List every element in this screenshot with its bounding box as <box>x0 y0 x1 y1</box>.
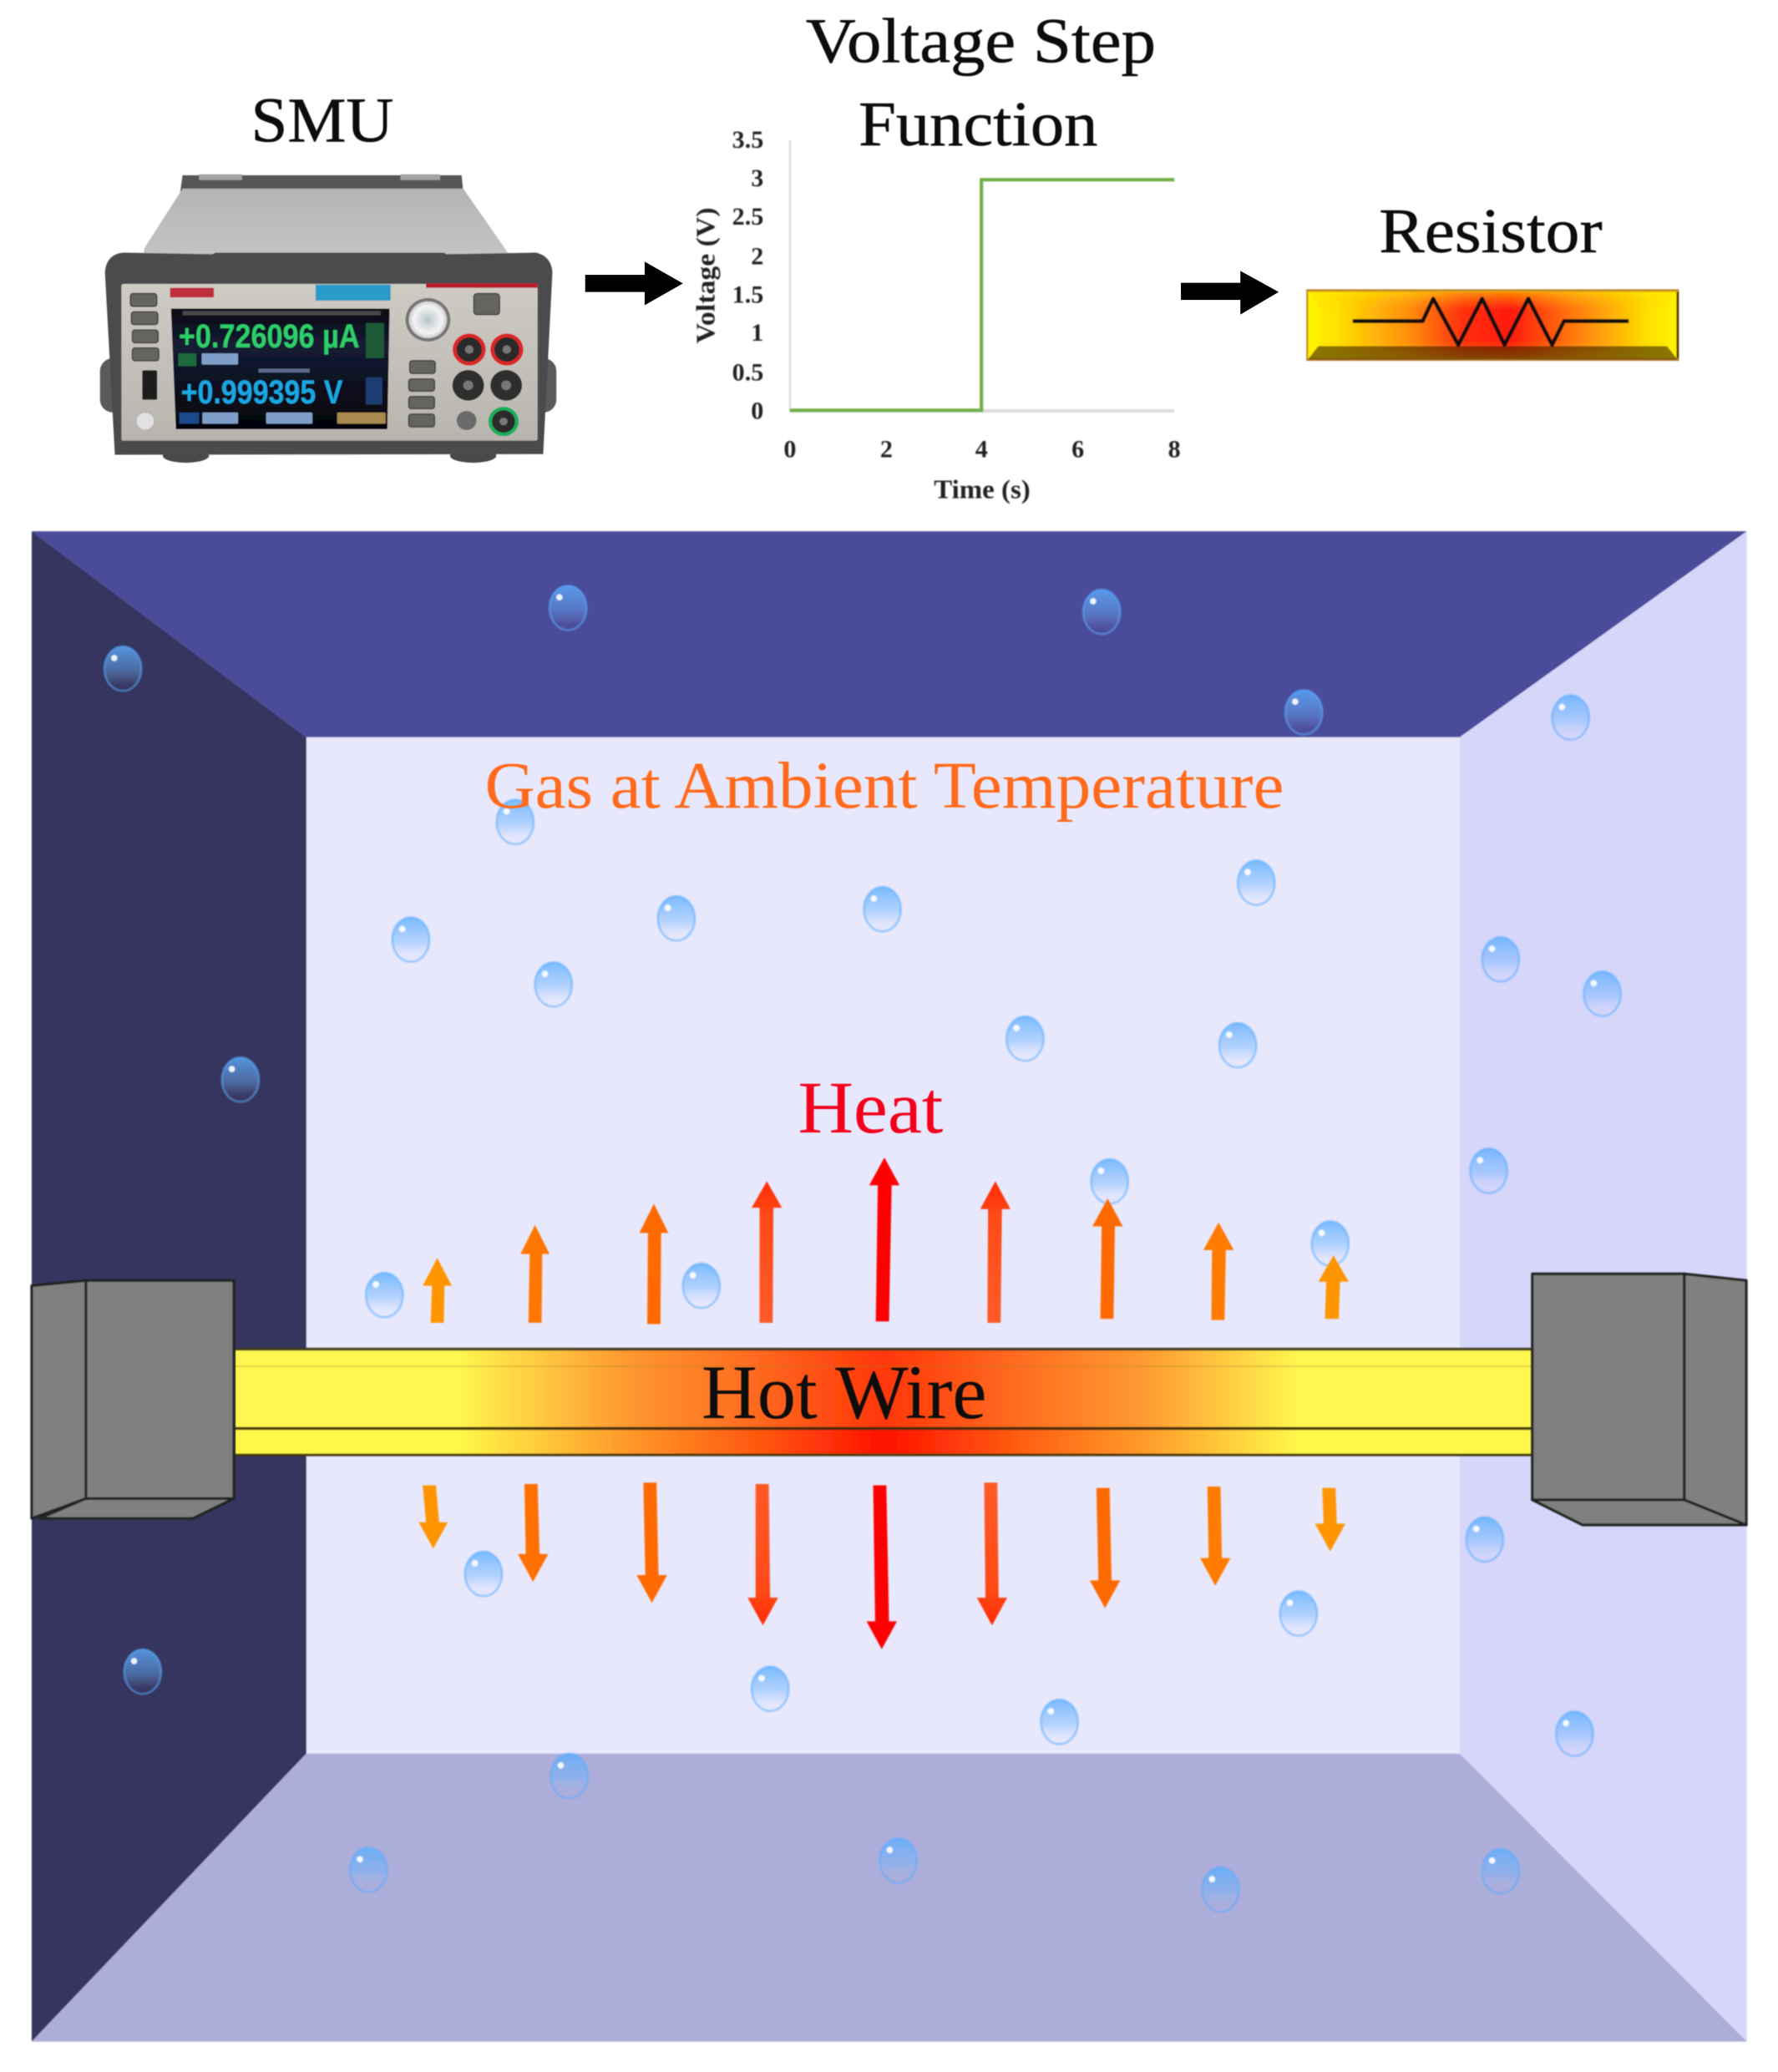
heat label: Heat <box>798 1067 944 1149</box>
resistor label: Resistor <box>1379 196 1603 266</box>
chamber back wall <box>306 737 1460 1754</box>
left keys <box>130 294 159 361</box>
resistor bevel <box>1308 347 1678 359</box>
display <box>171 309 390 429</box>
gas label: Gas at Ambient Temperature <box>484 750 1284 823</box>
rear handle <box>180 175 463 192</box>
chart axes <box>789 140 791 411</box>
gas molecules <box>104 585 1621 1912</box>
brand plates <box>170 288 214 297</box>
y axis ticks: 2.5 <box>732 202 763 231</box>
display buttons <box>202 353 238 365</box>
power button <box>137 413 154 429</box>
x axis ticks: 0 <box>783 434 796 463</box>
hot wire <box>236 1349 1532 1455</box>
x axis ticks <box>783 434 1181 463</box>
input jacks <box>453 333 486 366</box>
x axis ticks: 8 <box>1168 434 1181 463</box>
voltage step chart <box>691 125 1181 504</box>
y axis ticks <box>732 125 763 425</box>
SMU instrument: +0.999395 V <box>181 372 342 411</box>
y axis ticks: 1 <box>751 318 763 347</box>
right keys <box>408 294 499 427</box>
x axis ticks: 2 <box>880 434 893 463</box>
voltage step title: Voltage Step <box>806 6 1156 76</box>
arrow: SMU to voltage step <box>585 261 683 306</box>
feet <box>163 448 209 463</box>
step line <box>790 180 1174 410</box>
top cover <box>141 189 511 266</box>
arrow: voltage step to resistor <box>1181 271 1279 315</box>
SMU label: SMU <box>251 85 393 155</box>
right wire clamp <box>1532 1274 1746 1525</box>
resistor symbol <box>1353 299 1629 345</box>
y axis ticks: 0 <box>751 397 763 425</box>
hot wire label: Hot Wire <box>702 1350 987 1435</box>
SMU instrument: +0.726096 µA <box>179 317 360 355</box>
chamber right wall <box>1460 531 1747 2042</box>
chamber left wall <box>32 531 306 2042</box>
y axis ticks: 3 <box>751 164 763 192</box>
resistor <box>1308 291 1678 359</box>
y axis ticks: 2 <box>751 241 763 270</box>
y axis ticks: 1.5 <box>732 280 763 308</box>
x axis ticks: 4 <box>975 434 988 463</box>
voltage step title: Function <box>859 89 1097 160</box>
x axis title: Time (s) <box>934 475 1031 504</box>
chamber top wall <box>32 531 1747 737</box>
voltage step title <box>806 6 1156 160</box>
y axis ticks: 0.5 <box>732 358 763 387</box>
USB port <box>142 370 157 400</box>
heat arrows down <box>418 1482 1345 1649</box>
chamber bottom wall <box>32 1754 1747 2042</box>
panel: test chamber <box>32 531 1747 2042</box>
knob <box>406 298 450 342</box>
front frame <box>105 252 552 454</box>
heat arrows up <box>423 1158 1349 1324</box>
faceplate <box>121 284 538 441</box>
side bumpers <box>100 358 556 413</box>
SMU instrument <box>100 175 556 463</box>
y axis ticks: 3.5 <box>732 125 763 154</box>
y axis title: Voltage (V) <box>691 207 721 343</box>
x axis ticks: 6 <box>1071 434 1084 463</box>
left wire clamp <box>32 1280 234 1518</box>
